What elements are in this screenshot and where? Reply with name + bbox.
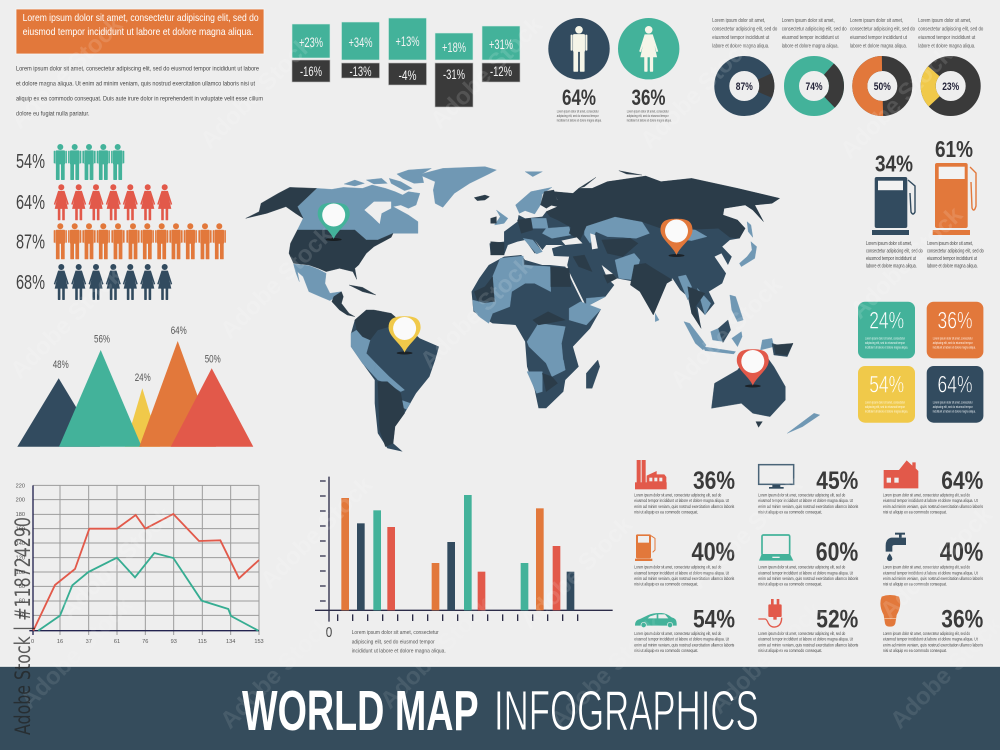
donut 50%: [860, 64, 905, 108]
y axis labels: 120: [16, 556, 25, 562]
x axis labels: 0: [31, 639, 34, 645]
chart: plus and minus percentage boxes: +18%: [442, 39, 466, 55]
card: orange 36%: incididunt ut labore et dolore magna aliqua.: [933, 346, 976, 350]
male percentage: 64%: [562, 85, 596, 110]
map pin: Asia: [660, 219, 692, 257]
stat: house 64%: nisi ut aliquip ex ea commodo consequat.: [883, 510, 947, 515]
map pin: North America: [318, 203, 350, 241]
caption column 4: Lorem ipsum dolor sit amet,: [918, 18, 971, 24]
stat: factory 36%: 36%: [693, 467, 735, 495]
card: teal 24%: incididunt ut labore et dolore magna aliqua.: [865, 346, 908, 350]
text: Adobe Stock: [425, 11, 548, 134]
stat: water tap 40%: 40%: [940, 537, 983, 567]
stat: monitor 45%: [758, 465, 859, 515]
intro paragraph: et dolore magna aliqua. Ut enim ad minim veniam, quis nostrud exercitation ullamco laboris nisi ut: [16, 80, 255, 88]
caption under orange pump: labore et dolore magna aliqua.: [927, 264, 978, 270]
card: yellow 54%: adipiscing elit, sed do eiusmod tempor: [865, 405, 906, 409]
caption column 3: [850, 18, 915, 50]
caption column 4: labore et dolore magna aliqua.: [918, 44, 975, 50]
intro paragraph: aliquip ex ea commodo consequat. Duis aute irure dolor in reprehenderit in voluptate velit esse cillum: [16, 96, 263, 102]
card: teal 24%: adipiscing elit, sed do eiusmod tempor: [865, 341, 906, 345]
caption under navy pump: consectetur adipiscing elit, sed do: [866, 248, 923, 254]
caption under orange pump: [927, 241, 984, 270]
male caption: incididunt ut labore et dolore magna aliqua.: [557, 118, 602, 122]
caption under navy pump: [866, 241, 923, 270]
card: orange 36%: Lorem ipsum dolor sit amet, consectetur: [933, 336, 973, 340]
row 54% men: [16, 144, 124, 180]
stat: plug 52%: 52%: [816, 605, 858, 633]
stat: factory 36%: enim ad minim veniam, quis nostrud exercitation ullamco laboris: [634, 504, 735, 509]
caption column 3: labore et dolore magna aliqua.: [850, 44, 907, 50]
text: Adobe Stock: [705, 596, 828, 719]
donut 87%: 87%: [736, 81, 753, 93]
x axis labels: 134: [226, 639, 235, 645]
chart: overlapping triangle peaks: 24%: [135, 372, 151, 384]
card: navy 64%: Lorem ipsum dolor sit amet, consectetur: [933, 400, 973, 404]
caption under navy pump: eiusmod tempor incididunt ut: [866, 256, 916, 262]
y axis labels: [16, 484, 25, 619]
caption under orange pump: Lorem ipsum dolor sit amet,: [927, 241, 973, 247]
stat: monitor 45%: nisi ut aliquip ex ea commodo consequat.: [758, 510, 822, 515]
caption column 2: Lorem ipsum dolor sit amet,: [782, 18, 835, 24]
y axis labels: 180: [16, 512, 25, 518]
map: continent base shapes: [351, 176, 780, 452]
text: Adobe Stock: [835, 41, 958, 164]
map: darkest countries: [246, 171, 793, 447]
row 68% women: 68%: [16, 272, 45, 294]
chart: plus and minus percentage boxes: -16%: [300, 63, 322, 79]
chart: plus and minus percentage boxes: +23%: [299, 34, 323, 50]
male caption: adipiscing elit, sed do eiusmod tempor: [557, 114, 599, 118]
caption under navy pump: Lorem ipsum dolor sit amet,: [866, 241, 912, 247]
text: Adobe Stock: [635, 31, 758, 154]
stat: water tap 40%: nisi ut aliquip ex ea commodo consequat.: [883, 582, 947, 587]
row 64% women: [16, 184, 172, 220]
intro paragraph: [16, 66, 263, 118]
text: Adobe Stock: [845, 201, 968, 324]
chart: plus and minus percentage boxes: -4%: [398, 67, 416, 83]
chart: plus and minus percentage boxes: +13%: [396, 33, 420, 49]
x axis labels: 76: [142, 639, 148, 645]
stat: plug 52%: nisi ut aliquip ex ea commodo consequat.: [758, 648, 822, 653]
chart: plus and minus percentage boxes: -31%: [443, 66, 465, 82]
intro paragraph: Lorem ipsum dolor sit amet, consectetur adipiscing elit, sed do eiusmod tempor incididunt ut labore: [16, 66, 259, 72]
stat: car 54%: 54%: [693, 605, 735, 633]
card: orange 36%: 36%: [938, 308, 972, 334]
world map: [246, 167, 820, 452]
text: Adobe Stock: [5, 11, 128, 134]
card: teal 24%: 24%: [869, 308, 904, 334]
chart: plus and minus percentage boxes: +34%: [348, 34, 372, 50]
row 87% men: 87%: [16, 232, 45, 254]
text: Adobe Stock: [415, 251, 538, 374]
footer band with title: [0, 666, 1000, 750]
stat: factory 36%: nisi ut aliquip ex ea commodo consequat.: [634, 510, 698, 515]
y axis labels: 160: [16, 526, 25, 532]
card: teal 24%: Lorem ipsum dolor sit amet, consectetur: [865, 336, 906, 340]
intro paragraph: dolore eu fugiat nulla pariatur.: [16, 110, 90, 118]
stat: house 64%: 64%: [941, 467, 983, 495]
zero label: 0: [326, 624, 332, 641]
stat: fuel pump 40%: 40%: [692, 537, 735, 567]
stat: factory 36%: eiusmod tempor incididunt ut labore et dolore magna aliqua. Ut: [634, 498, 730, 503]
y axis labels: 80: [19, 584, 25, 590]
orange headline box: Lorem ipsum dolor sit amet, consectetur adipiscing elit, sed do: [23, 13, 259, 24]
stat: plug 52%: [758, 599, 859, 653]
card: navy 64%: adipiscing elit, sed do eiusmod tempor: [933, 405, 973, 409]
caption column 2: eiusmod tempor incididunt ut: [782, 35, 839, 41]
icon: man in navy circle: [548, 18, 610, 79]
y axis labels: 140: [16, 541, 25, 547]
donut 74%: [782, 54, 846, 118]
card: navy 64%: incididunt ut labore et dolore magna aliqua.: [933, 410, 976, 414]
card: orange 36%: adipiscing elit, sed do eiusmod tempor: [933, 341, 973, 345]
bar chart caption: [352, 630, 446, 655]
bar chart caption: adipiscing elit, sed do eiusmod tempor: [352, 639, 435, 645]
bar chart caption: incididunt ut labore et dolore magna aliqua.: [352, 649, 446, 655]
chart: plus and minus percentage boxes: -13%: [350, 63, 372, 79]
panel: donut charts with captions: [712, 18, 983, 118]
stat: laptop 60%: [758, 535, 859, 587]
male caption: Lorem ipsum dolor sit amet, consectetur: [557, 110, 599, 114]
stat: fuel pump 40%: nisi ut aliquip ex ea commodo consequat.: [634, 582, 698, 587]
stat: laptop 60%: eiusmod tempor incididunt ut labore et dolore magna aliqua. Ut: [758, 570, 854, 575]
orange headline box: eiusmod tempor incididunt ut labore et dolore magna aliqua.: [23, 27, 254, 38]
x axis labels: 61: [114, 639, 120, 645]
stat: laptop 60%: enim ad minim veniam, quis nostrud exercitation ullamco laboris: [758, 576, 859, 581]
stat: fuel pump 40%: eiusmod tempor incididunt ut labore et dolore magna aliqua. Ut: [634, 570, 730, 575]
chart: overlapping triangle peaks: 48%: [53, 359, 69, 371]
stat: car 54%: nisi ut aliquip ex ea commodo consequat.: [634, 648, 698, 653]
map: inland seas and Hudson Bay: [364, 202, 598, 249]
chart: overlapping triangle peaks: [17, 325, 253, 447]
female caption: adipiscing elit, sed do eiusmod tempor: [627, 114, 669, 118]
panel: icon statistics grid: [634, 460, 984, 653]
card: yellow 54%: Lorem ipsum dolor sit amet, consectetur: [865, 400, 906, 404]
stat: monitor 45%: enim ad minim veniam, quis nostrud exercitation ullamco laboris: [758, 504, 859, 509]
y axis labels: 60: [19, 598, 25, 604]
donut 74%: 74%: [806, 81, 823, 93]
chart: grouped bar chart: [315, 477, 613, 655]
icon: woman in teal circle: [618, 18, 679, 79]
y axis labels: 200: [16, 498, 25, 504]
stat: fuel pump 40%: Lorem ipsum dolor sit amet, consectetur adipiscing elit, sed do: [634, 565, 722, 570]
caption column 2: consectetur adipiscing elit, sed do: [782, 26, 847, 32]
panel: fuel pumps: [866, 136, 984, 270]
text: Adobe Stock: [375, 591, 498, 714]
caption column 1: eiusmod tempor incididunt ut: [712, 35, 770, 41]
caption column 4: [918, 18, 983, 50]
stat: factory 36%: [634, 460, 735, 515]
x axis labels: [31, 639, 264, 645]
stat: water tap 40%: [883, 533, 984, 587]
y axis labels: 40: [19, 613, 25, 619]
x axis labels: 37: [86, 639, 92, 645]
stat: laptop 60%: nisi ut aliquip ex ea commodo consequat.: [758, 582, 822, 587]
donut 23%: [919, 54, 982, 118]
bar chart caption: Lorem ipsum dolor sit amet, consectetur: [352, 630, 439, 636]
x axis labels: 93: [171, 639, 177, 645]
stat: fuel pump 40%: enim ad minim veniam, quis nostrud exercitation ullamco laboris: [634, 576, 735, 581]
caption column 1: Lorem ipsum dolor sit amet,: [712, 18, 765, 24]
axes and ticks: [315, 477, 613, 622]
caption under navy pump: labore et dolore magna aliqua.: [866, 264, 917, 270]
female caption: [627, 110, 672, 122]
donut 23%: 23%: [942, 81, 959, 93]
panel: coloured stat cards: [858, 302, 983, 423]
female caption: Lorem ipsum dolor sit amet, consectetur: [627, 110, 669, 114]
bars: [341, 495, 574, 610]
title: [242, 679, 759, 743]
title: INFOGRAPHICS: [494, 679, 759, 743]
text: Adobe Stock: [515, 511, 638, 634]
x axis labels: 16: [57, 639, 63, 645]
text: Adobe Stock: [545, 611, 668, 734]
donut 50%: 50%: [874, 81, 891, 93]
text: Adobe Stock: [215, 221, 338, 344]
stat: plug 52%: Lorem ipsum dolor sit amet, consectetur adipiscing elit, sed do: [758, 631, 846, 636]
chart: overlapping triangle peaks: 50%: [205, 354, 221, 366]
text: Adobe Stock: [5, 261, 128, 384]
61% pump value: 61%: [935, 136, 973, 162]
icon: navy fuel pump: [872, 177, 915, 235]
text: Adobe Stock: [215, 611, 338, 734]
chart: plus and minus percentage boxes: -12%: [490, 63, 512, 79]
map pin: Australia: [737, 349, 769, 388]
red data line: [33, 514, 259, 631]
chart: overlapping triangle peaks: 64%: [171, 325, 187, 337]
male caption: [557, 110, 602, 122]
row 54% men: 54%: [16, 151, 45, 173]
text: Adobe Stock: [15, 591, 138, 714]
chart: line chart: [16, 484, 264, 645]
card: teal 24%: [858, 302, 915, 358]
card: navy 64%: 64%: [938, 372, 972, 399]
text: Adobe Stock: [195, 31, 318, 154]
row 87% men: [16, 223, 226, 259]
stat: car 54%: Lorem ipsum dolor sit amet, consectetur adipiscing elit, sed do: [634, 631, 722, 636]
map pin: South America: [389, 316, 421, 354]
teal data line: [38, 553, 258, 631]
stat: light bulb 36%: 36%: [941, 605, 983, 633]
stat: plug 52%: enim ad minim veniam, quis nostrud exercitation ullamco laboris: [758, 642, 859, 647]
stat: plug 52%: eiusmod tempor incididunt ut labore et dolore magna aliqua. Ut: [758, 637, 854, 642]
female percentage: 36%: [632, 85, 666, 110]
card: navy 64%: [927, 366, 983, 423]
map: mid coloured countries: [586, 320, 793, 417]
stat: car 54%: eiusmod tempor incididunt ut labore et dolore magna aliqua. Ut: [634, 637, 730, 642]
stat: factory 36%: Lorem ipsum dolor sit amet, consectetur adipiscing elit, sed do: [634, 492, 722, 497]
caption column 4: consectetur adipiscing elit, sed do: [918, 26, 983, 32]
caption column 3: eiusmod tempor incididunt ut: [850, 35, 907, 41]
chart: plus and minus percentage boxes: [292, 18, 520, 107]
chart: plus and minus percentage boxes: +31%: [489, 36, 513, 52]
text: Adobe Stock: [875, 501, 998, 624]
row 68% women: [16, 264, 172, 300]
caption column 2: [782, 18, 847, 50]
card: yellow 54%: 54%: [869, 372, 904, 399]
caption column 1: labore et dolore magna aliqua.: [712, 44, 769, 50]
stat: laptop 60%: Lorem ipsum dolor sit amet, consectetur adipiscing elit, sed do: [758, 565, 846, 570]
caption column 1: [712, 18, 777, 50]
stat: light bulb 36%: nisi ut aliquip ex ea commodo consequat.: [883, 648, 947, 653]
row 64% women: 64%: [16, 192, 45, 214]
text: Adobe Stock: [55, 501, 178, 624]
stat: light bulb 36%: [880, 595, 984, 653]
x axis labels: 115: [198, 639, 207, 645]
caption column 1: consectetur adipiscing elit, sed do: [712, 26, 777, 32]
chart: overlapping triangle peaks: 56%: [94, 334, 110, 346]
caption column 2: labore et dolore magna aliqua.: [782, 44, 839, 50]
panel: intro text: [16, 9, 264, 118]
y axis labels: 220: [16, 484, 25, 490]
stat: fuel pump 40%: [634, 534, 735, 587]
caption column 3: consectetur adipiscing elit, sed do: [850, 26, 915, 32]
y axis labels: 100: [16, 570, 25, 576]
stat: house 64%: [883, 460, 984, 515]
panel: people pictograms: [16, 144, 226, 300]
stat: car 54%: enim ad minim veniam, quis nostrud exercitation ullamco laboris: [634, 642, 735, 647]
stock image id strip: Adobe Stock | #118724290: [11, 517, 36, 735]
stat: car 54%: [634, 605, 735, 653]
stat: laptop 60%: 60%: [816, 537, 858, 567]
map: light coloured countries: [294, 167, 820, 433]
panel: gender split: [548, 18, 679, 122]
card: orange 36%: [927, 302, 983, 358]
stat: monitor 45%: eiusmod tempor incididunt ut labore et dolore magna aliqua. Ut: [758, 498, 854, 503]
x axis labels: 153: [254, 639, 264, 645]
stat: monitor 45%: Lorem ipsum dolor sit amet, consectetur adipiscing elit, sed do: [758, 492, 846, 497]
caption column 3: Lorem ipsum dolor sit amet,: [850, 18, 903, 24]
text: Adobe Stock: [685, 471, 808, 594]
female caption: incididunt ut labore et dolore magna aliqua.: [627, 118, 672, 122]
orange headline box: [16, 9, 264, 54]
caption column 4: eiusmod tempor incididunt ut: [918, 35, 976, 41]
icon: orange fuel pump: [933, 163, 976, 235]
text: Adobe Stock: [255, 471, 378, 594]
34% pump value: 34%: [875, 150, 913, 176]
card: yellow 54%: incididunt ut labore et dolore magna aliqua.: [865, 410, 908, 414]
caption under orange pump: eiusmod tempor incididunt ut: [927, 256, 977, 262]
text: Adobe Stock: [665, 271, 788, 394]
stat: monitor 45%: 45%: [816, 467, 858, 495]
donut 87%: [715, 56, 774, 116]
card: yellow 54%: [858, 366, 915, 423]
title: WORLD MAP: [242, 679, 479, 743]
